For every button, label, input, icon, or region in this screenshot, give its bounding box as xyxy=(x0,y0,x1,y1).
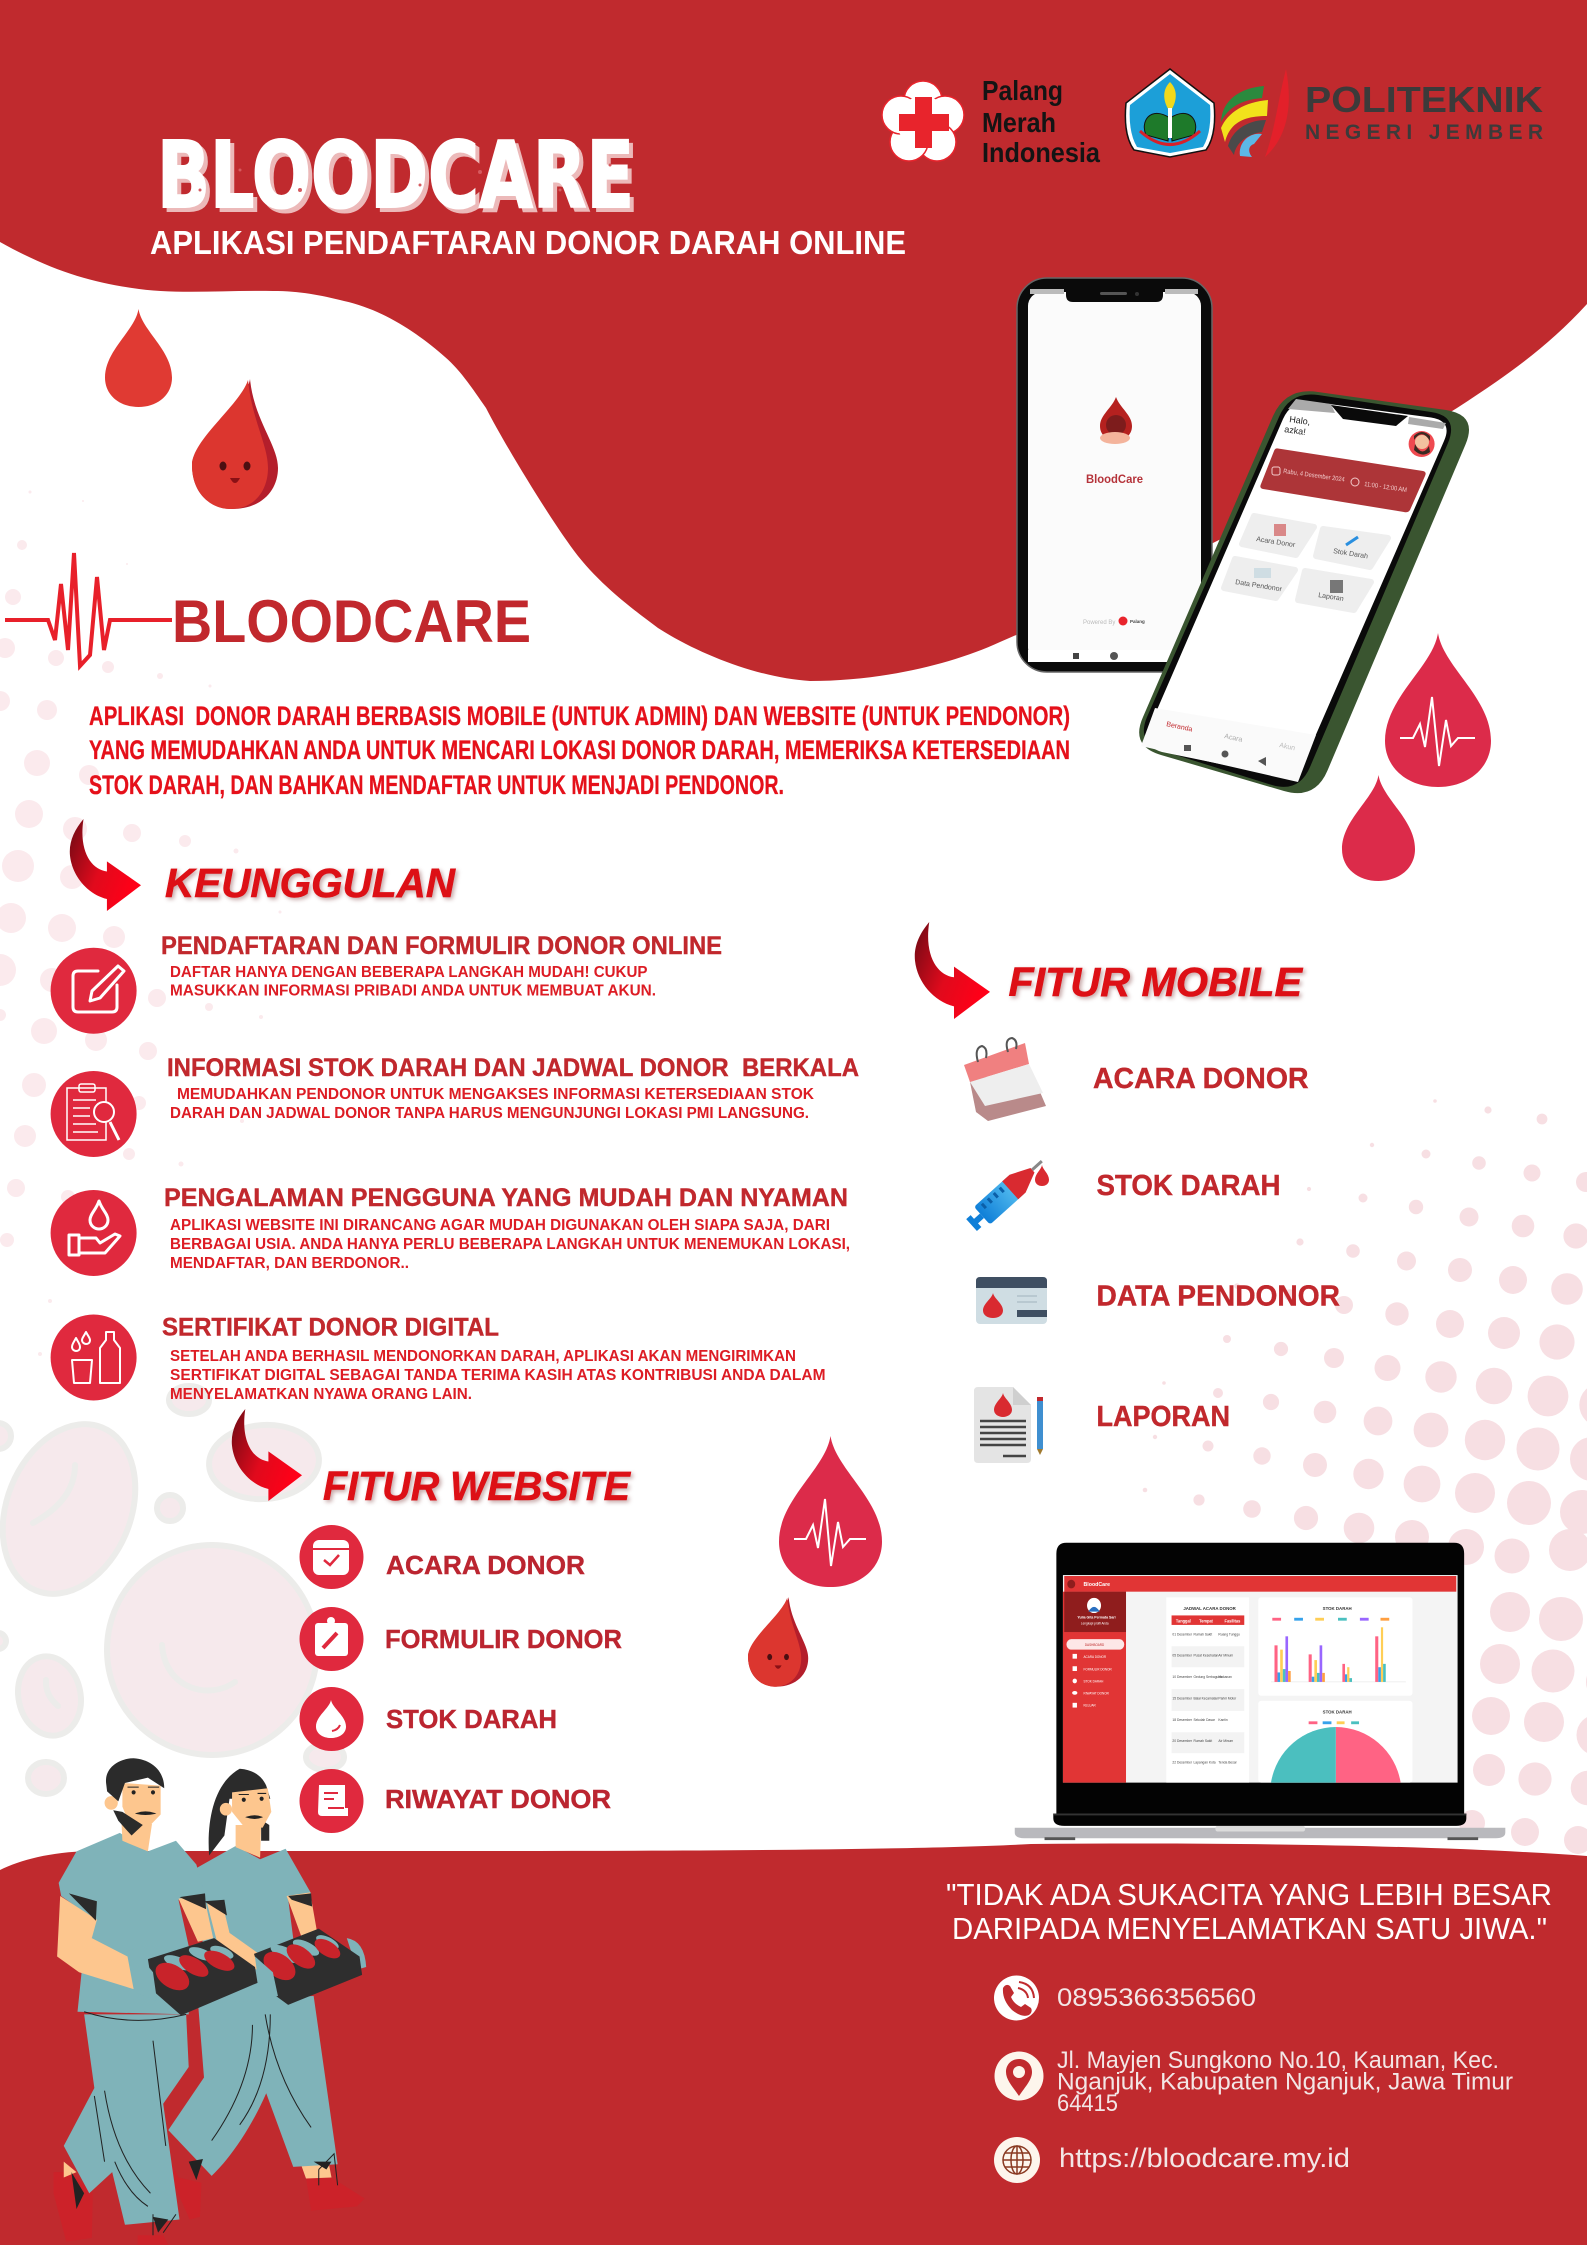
quote xyxy=(946,1877,1552,1946)
laptop screen: dashboard: 18 Desember xyxy=(1172,1718,1193,1722)
laptop screen: dashboard: Ruang Tunggu xyxy=(1218,1632,1240,1636)
bottom red footer shape xyxy=(0,1844,1587,2245)
contact: website: https://bloodcare.my.id xyxy=(1059,2143,1350,2173)
phone mockup: dashboard screen: Acara xyxy=(1224,733,1243,744)
contact: address: 64415 xyxy=(1057,2090,1118,2117)
subtitle: APLIKASI PENDAFTARAN DONOR DARAH ONLINE xyxy=(150,224,906,261)
contact: phone xyxy=(994,1976,1256,2020)
blood tray: man xyxy=(128,1938,258,2015)
panel: keunggulan item 2: INFORMASI STOK DARAH DAN JADWAL DONOR BERKALA xyxy=(167,1054,859,1082)
phone mockup: dashboard screen: Akun xyxy=(1279,742,1296,752)
laptop screen: dashboard: RIWAYAT DONOR xyxy=(1084,1692,1109,1696)
icon: plain blood drop xyxy=(105,309,172,407)
panel: keunggulan item 4: MENYELAMATKAN NYAWA ORANG LAIN. xyxy=(170,1386,472,1403)
panel: keunggulan item 1 xyxy=(51,932,722,1034)
laptop screen: dashboard: JADWAL ACARA DONOR xyxy=(1183,1606,1236,1611)
icon: report document xyxy=(974,1387,1043,1463)
panel: keunggulan item 3 xyxy=(51,1184,850,1276)
panel: keunggulan item 2: MEMUDAHKAN PENDONOR UNTUK MENGAKSES INFORMASI KETERSEDIAAN STOK xyxy=(177,1086,815,1103)
laptop screen: dashboard: 10 Desember xyxy=(1172,1675,1193,1679)
label: data pendonor: DATA PENDONOR xyxy=(1096,1280,1340,1312)
panel: keunggulan item 4: SETELAH ANDA BERHASIL MENDONORKAN DARAH, APLIKASI AKAN MENGIRIMKAN xyxy=(170,1348,796,1365)
icon: water glass and bottle xyxy=(51,1314,137,1400)
laptop mockup xyxy=(1015,1543,1505,1840)
laptop screen: dashboard: STOK DARAH xyxy=(1084,1679,1104,1683)
laptop screen: dashboard: STOK DARAH xyxy=(1323,1606,1352,1611)
icon: scroll history xyxy=(300,1769,364,1833)
laptop screen: dashboard: Tenda Besar xyxy=(1218,1761,1238,1765)
panel: keunggulan item 3: BERBAGAI USIA. ANDA HANYA PERLU BEBERAPA LANGKAH UNTUK MENEMUKAN LOKASI, xyxy=(170,1236,850,1253)
icon: clipboard and magnifier xyxy=(51,1071,137,1157)
icon: globe xyxy=(994,2137,1040,2183)
quote: "TIDAK ADA SUKACITA YANG LEBIH BESAR xyxy=(946,1877,1552,1912)
laptop screen: dashboard: 15 Desember xyxy=(1172,1696,1193,1701)
laptop screen: dashboard: Pusat Kesehatan xyxy=(1193,1654,1218,1658)
laptop screen: dashboard: Parkir Motor xyxy=(1218,1696,1237,1701)
laptop screen: dashboard: Air Minum xyxy=(1218,1654,1233,1658)
laptop screen: dashboard: 22 Desember xyxy=(1172,1761,1193,1765)
laptop screen: dashboard: Balai Kecamatan xyxy=(1193,1696,1218,1701)
contact: address: Jl. Mayjen Sungkono No.10, Kauman, Kec. xyxy=(1057,2047,1499,2074)
icon: phone xyxy=(994,1976,1039,2020)
top red wave header xyxy=(0,0,1587,681)
phone mockup: dashboard screen: Data Pendonor xyxy=(1235,579,1283,593)
logo: Palang Merah Indonesia: Merah xyxy=(982,107,1056,138)
man figure xyxy=(54,1758,213,2245)
laptop screen: dashboard: 01 Desember xyxy=(1172,1632,1193,1636)
laptop screen: dashboard: Makanan xyxy=(1218,1675,1232,1679)
label: laporan: LAPORAN xyxy=(1096,1401,1230,1433)
icon: calendar xyxy=(964,1038,1046,1121)
phone mockup: dashboard screen: Laporan xyxy=(1318,592,1344,603)
description paragraph: YANG MEMUDAHKAN ANDA UNTUK MENCARI LOKASI DONOR DARAH, MEMERIKSA KETERSEDIAAN xyxy=(89,735,1070,765)
heading: KEUNGGULAN: KEUNGGULAN xyxy=(165,860,456,906)
label: acara donor: ACARA DONOR xyxy=(386,1552,585,1580)
laptop screen: dashboard: BloodCare xyxy=(1084,1582,1110,1588)
panel: keunggulan item 4 xyxy=(51,1314,826,1403)
icon: drop with heartbeat middle xyxy=(779,1436,882,1587)
logo: Politeknik Negeri Jember swoosh xyxy=(1221,69,1289,157)
heading: FITUR WEBSITE: FITUR WEBSITE xyxy=(323,1463,632,1509)
blood tray: woman xyxy=(254,1929,362,2005)
arrow: fitur website xyxy=(232,1409,302,1501)
logo: crest Politeknik Negeri Jember xyxy=(1125,69,1215,157)
laptop screen: dashboard: Rumah Sakit xyxy=(1193,1632,1212,1636)
logo text: POLITEKNIK NEGERI JEMBER: POLITEKNIK xyxy=(1305,79,1543,120)
label: acara donor: ACARA DONOR xyxy=(1093,1063,1309,1095)
laptop screen: dashboard: ACARA DONOR xyxy=(1084,1655,1107,1659)
contact: address: Nganjuk, Kabupaten Nganjuk, Jawa Timur xyxy=(1057,2068,1513,2096)
icon: form clipboard xyxy=(300,1607,364,1671)
laptop screen: dashboard: Rumah Sakit xyxy=(1193,1739,1212,1743)
phone mockup: dashboard screen: Halo, xyxy=(1289,414,1311,427)
laptop screen: dashboard: Kantin xyxy=(1218,1718,1228,1722)
heading: BLOODCARE with heartbeat line: BLOODCARE xyxy=(172,588,531,655)
contact: website xyxy=(994,2137,1350,2183)
laptop screen: dashboard: Air Minum xyxy=(1218,1739,1233,1743)
phone mockup: splash screen xyxy=(1017,278,1212,672)
heading: FITUR MOBILE: FITUR MOBILE xyxy=(1008,959,1304,1005)
laptop screen: dashboard: Gedung Serbaguna xyxy=(1193,1675,1222,1679)
background: blood cells xyxy=(0,1386,344,1794)
arrow: keunggulan xyxy=(70,819,141,911)
panel: keunggulan item 1: MASUKKAN INFORMASI PRIBADI ANDA UNTUK MEMBUAT AKUN. xyxy=(170,983,656,1000)
icon: edit form xyxy=(51,948,137,1034)
laptop screen: dashboard: KELUAR xyxy=(1084,1704,1096,1708)
panel: fitur website list xyxy=(300,1525,622,1833)
icon: cute small drop xyxy=(748,1597,808,1687)
description paragraph: APLIKASI DONOR DARAH BERBASIS MOBILE (UNTUK ADMIN) DAN WEBSITE (UNTUK PENDONOR) xyxy=(89,701,1070,731)
laptop screen: dashboard xyxy=(1063,1575,1458,1783)
phone mockup: dashboard screen: Acara Donor xyxy=(1256,536,1296,549)
phone mockup: dashboard screen xyxy=(1139,391,1469,793)
laptop screen: dashboard: Fasilitas xyxy=(1225,1618,1241,1624)
phone mockup: dashboard screen: Rabu, 4 Desember 2024 xyxy=(1283,468,1345,484)
phone mockup: dashboard screen: 11:00 - 12:00 AM xyxy=(1364,481,1407,494)
panel: keunggulan item 4: SERTIFIKAT DONOR DIGITAL xyxy=(162,1314,499,1342)
background dot pattern: right halftone xyxy=(1143,1099,1587,1854)
arrow: fitur mobile xyxy=(915,922,990,1019)
phone mockup: splash screen: Powered By xyxy=(1083,620,1115,626)
phone mockup: dashboard screen: Beranda xyxy=(1166,721,1193,733)
icon: cute blood drop xyxy=(192,379,278,509)
laptop screen: dashboard: DASHBOARD xyxy=(1085,1643,1105,1647)
phone mockup: dashboard screen: azka! xyxy=(1284,424,1306,437)
logo: Palang Merah Indonesia: Indonesia xyxy=(982,137,1100,168)
laptop screen: dashboard: Lapangan Kota xyxy=(1193,1761,1216,1765)
logo: Palang Merah Indonesia: Palang xyxy=(982,75,1063,106)
description paragraph xyxy=(89,701,1070,800)
panel: keunggulan item 4: SERTIFIKAT DIGITAL SEBAGAI TANDA TERIMA KASIH ATAS KONTRIBUSI ANDA DALAM xyxy=(170,1367,826,1384)
icon: donor card xyxy=(976,1277,1047,1324)
phone mockup: splash screen: Palang xyxy=(1130,619,1145,624)
phone mockup: splash screen: BloodCare xyxy=(1086,472,1143,486)
description paragraph: STOK DARAH, DAN BAHKAN MENDAFTAR UNTUK MENJADI PENDONOR. xyxy=(89,770,784,800)
laptop screen: dashboard: FORMULIR DONOR xyxy=(1084,1667,1112,1672)
panel: keunggulan item 3: PENGALAMAN PENGGUNA YANG MUDAH DAN NYAMAN xyxy=(164,1184,848,1212)
icon: hand holding drop xyxy=(51,1190,137,1276)
contact: address xyxy=(994,2047,1513,2117)
label: stok darah: STOK DARAH xyxy=(1096,1170,1280,1202)
label: formulir donor: FORMULIR DONOR xyxy=(385,1626,622,1654)
laptop screen: dashboard: Tanggal xyxy=(1176,1618,1191,1624)
title: BLOODCARE: BLOODCARE xyxy=(157,122,634,229)
contact: phone: 0895366356560 xyxy=(1057,1984,1256,2012)
background dot pattern: left xyxy=(0,490,282,1356)
panel: keunggulan item 1: DAFTAR HANYA DENGAN BEBERAPA LANGKAH MUDAH! CUKUP xyxy=(170,964,648,981)
icon: location pin xyxy=(994,2052,1044,2100)
laptop screen: dashboard: Yulia Gita Permata Sari xyxy=(1077,1616,1116,1620)
laptop screen: dashboard: STOK DARAH xyxy=(1323,1710,1352,1715)
quote: DARIPADA MENYELAMATKAN SATU JIWA." xyxy=(952,1911,1547,1946)
icon: blood drop xyxy=(300,1687,364,1751)
laptop screen: dashboard: 05 Desember xyxy=(1172,1654,1193,1658)
logo text: POLITEKNIK NEGERI JEMBER: NEGERI JEMBER xyxy=(1305,121,1543,144)
illustration: two medical workers carrying blood tray xyxy=(54,1758,366,2245)
laptop screen: dashboard: Tempat xyxy=(1199,1618,1213,1624)
woman figure xyxy=(168,1769,366,2220)
laptop screen: dashboard: Lengkapi profil Anda xyxy=(1081,1621,1109,1625)
icon: calendar check xyxy=(300,1525,364,1589)
panel: keunggulan item 2: DARAH DAN JADWAL DONOR TANPA HARUS MENGUNJUNGI LOKASI PMI LANGSUNG. xyxy=(170,1105,809,1122)
laptop screen: dashboard: 20 Desember xyxy=(1172,1739,1193,1743)
panel: fitur mobile list xyxy=(964,1038,1340,1463)
panel: keunggulan item 1: PENDAFTARAN DAN FORMULIR DONOR ONLINE xyxy=(161,932,722,960)
logo text: POLITEKNIK NEGERI JEMBER xyxy=(1305,79,1543,144)
logo: Palang Merah Indonesia xyxy=(882,75,1100,168)
laptop screen: dashboard: Sekolah Dasar xyxy=(1193,1718,1216,1722)
panel: keunggulan item 3: MENDAFTAR, DAN BERDONOR.. xyxy=(170,1255,409,1272)
panel: keunggulan item 2 xyxy=(51,1054,859,1157)
panel: keunggulan item 3: APLIKASI WEBSITE INI DIRANCANG AGAR MUDAH DIGUNAKAN OLEH SIAPA SAJA, DARI xyxy=(170,1217,830,1234)
heading: BLOODCARE with heartbeat line xyxy=(5,553,531,666)
label: riwayat donor: RIWAYAT DONOR xyxy=(385,1786,611,1814)
icon: small drop xyxy=(1342,775,1415,881)
phone mockup: dashboard screen: Stok Darah xyxy=(1333,548,1368,560)
icon: drop with heartbeat xyxy=(1385,633,1491,787)
title: BLOODCARE: BLOODCARE xyxy=(161,126,638,233)
icon: syringe xyxy=(964,1153,1050,1234)
label: stok darah: STOK DARAH xyxy=(386,1706,557,1734)
